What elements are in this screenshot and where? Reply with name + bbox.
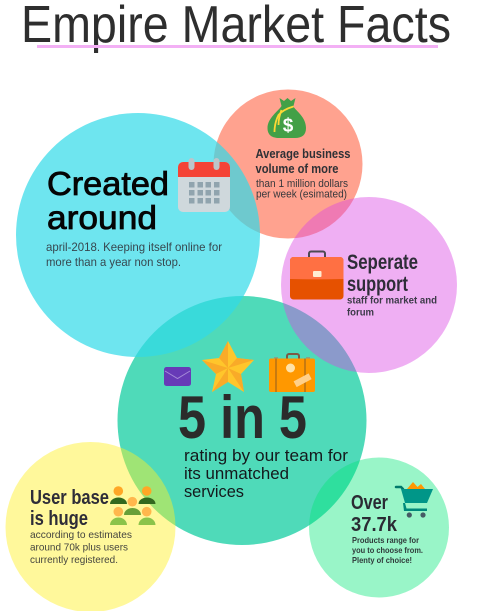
text: rating description [184,446,348,501]
text: created around description [46,240,222,269]
heading: created around [47,165,169,236]
text: products description: you to choose from. [352,545,423,555]
icon: money bag: $ [283,116,294,136]
heading: average business volume: Average business [256,146,350,161]
text: user base description [30,529,132,566]
icon: shopping cart [396,482,433,518]
heading: average business volume [256,146,350,176]
text: business volume description: per week (esimated) [256,188,347,200]
text: rating description: its unmatched [184,464,289,483]
text: user base description: currently registered. [30,554,118,566]
text: support description [347,296,437,318]
text: user base description: around 70k plus users [30,542,128,554]
title underline [37,45,438,48]
icon: envelope [164,367,191,386]
text: user base description: according to estimates [30,529,132,541]
icon: money bag [268,98,306,138]
heading: over 37.7k: 37.7k [351,513,398,536]
heading: seperate support: Seperate [347,251,418,274]
circle: created around panel [16,113,260,357]
text: products description: Plenty of choice! [352,555,412,565]
text: rating description: rating by our team for [184,446,348,465]
heading: seperate support: support [347,273,408,296]
heading: over 37.7k [351,491,398,536]
icon: briefcase [290,252,344,300]
circle: products panel [309,458,449,598]
circle: rating panel [118,296,366,545]
heading: user base is huge: User base [30,487,109,509]
circle: separate support panel [281,197,457,373]
text: created around description: more than a year non stop. [46,255,181,269]
heading: created around: around [47,199,157,236]
text: business volume description: than 1 million dollars [256,178,348,190]
text: business volume description [256,178,348,200]
heading: over 37.7k: Over [351,491,388,514]
text: support description: staff for market and [347,296,437,306]
heading: seperate support [347,251,418,296]
icon: star [202,341,254,392]
text: support description: forum [347,308,374,318]
heading: user base is huge [30,487,109,530]
circle: user base panel [6,442,176,611]
text: rating description: services [184,482,244,501]
icon: group of people [110,486,156,525]
icon: calendar [178,158,230,212]
heading: 5 in 5: 5 in 5 [178,384,307,451]
heading: user base is huge: is huge [30,508,88,530]
heading: average business volume: volume of more [256,161,338,176]
heading: created around: Created [47,165,169,202]
text: products description [352,535,423,565]
circle: business volume panel [214,90,362,238]
text: products description: Products range for [352,535,420,545]
text: created around description: april-2018. Keeping itself online for [46,240,222,254]
icon: suitcase [269,354,315,392]
